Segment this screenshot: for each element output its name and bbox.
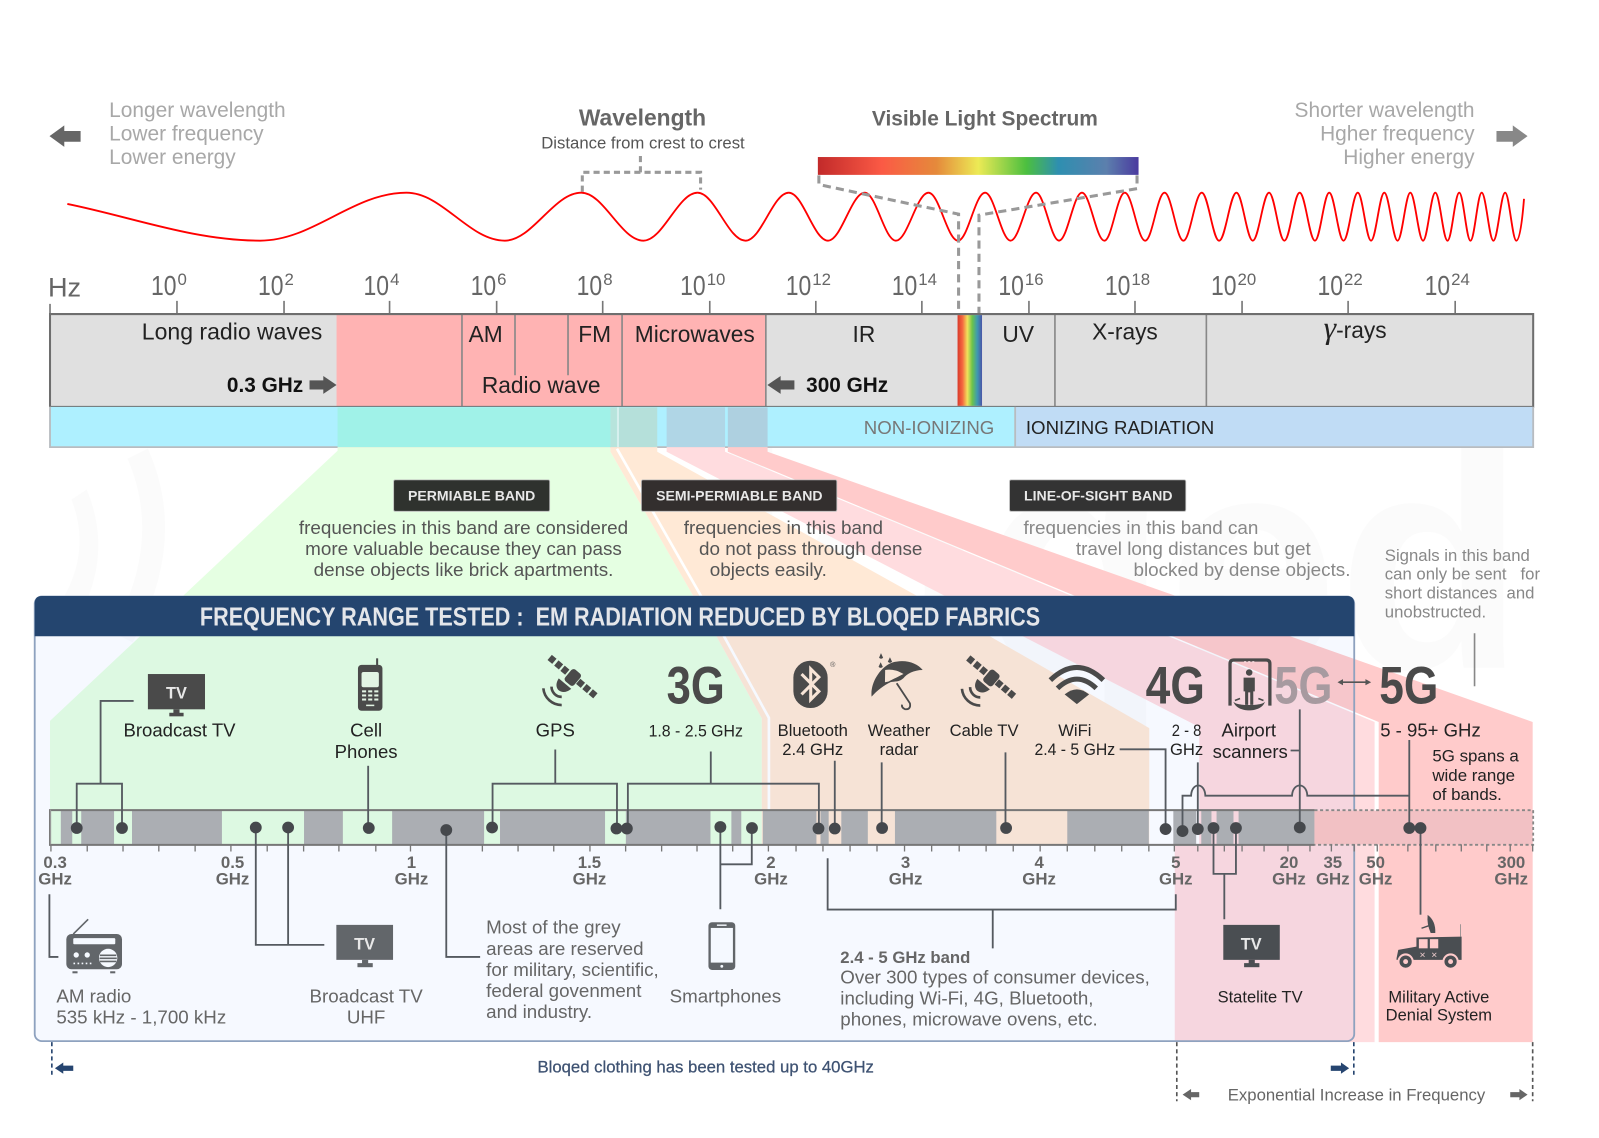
label: military active denial: [1386, 988, 1492, 1025]
text: short distance note: unobstructed.: [1385, 602, 1486, 621]
tag: semi-permeable band: [641, 480, 837, 511]
bar axis labels: 0.5: [221, 853, 244, 872]
text: line-of-sight description: frequencies in this band can: [1024, 517, 1258, 538]
label: military active denial: Denial System: [1386, 1007, 1492, 1025]
frequency axis labels: 12: [812, 270, 831, 289]
label: satellite TV: Statelite TV: [1218, 988, 1303, 1006]
bar axis labels: 4: [1034, 853, 1044, 872]
ionization strip: IONIZING RADIATION: [1026, 417, 1214, 438]
text: 2.4-5 GHz band note: Over 300 types of consumer devices,: [840, 967, 1150, 988]
spectrum band table: UV: [1002, 321, 1035, 347]
label: bluetooth: 2.4 GHz: [782, 740, 843, 759]
note: 5G spans: of bands.: [1432, 785, 1502, 804]
frequency axis labels: 14: [918, 270, 937, 289]
label: 4G range: [1170, 721, 1203, 759]
arrow: tested right: [1331, 1063, 1349, 1074]
watermark: faint logo: bloqed: [522, 391, 1525, 735]
text: semi-permeable description: do not pass through dense: [699, 538, 922, 559]
data point dots: [71, 821, 1426, 837]
label: 4G range: GHz: [1170, 740, 1203, 759]
icon: military vehicle: [1397, 915, 1462, 970]
heading: wavelength: Wavelength: [579, 104, 706, 130]
band: permeable green: [50, 447, 762, 844]
bar axis labels: GHz: [216, 870, 249, 889]
label: cell phones: Cell: [350, 720, 382, 741]
bar axis labels: GHz: [889, 870, 922, 889]
spectrum band table: Radio wave: [482, 372, 601, 398]
heading: visible light spectrum: Visible Light Spectrum: [872, 107, 1098, 130]
bar axis labels: GHz: [754, 870, 788, 889]
text: short distance note: [1385, 546, 1540, 621]
icon: wifi: [1050, 667, 1103, 704]
text: short distance note: short distances and: [1385, 584, 1534, 603]
icon: 3G: 3G: [667, 657, 725, 716]
text: grey areas note: for military, scientific,: [486, 959, 659, 980]
arrow: exponential left: [1183, 1089, 1199, 1100]
spectrum band table: X-rays: [1092, 319, 1158, 345]
frequency axis labels: 10: [1211, 270, 1236, 301]
spectrum band table: [50, 310, 1533, 407]
spectrum band table: 0.3 GHz: [227, 374, 303, 397]
frequency axis labels: 2: [285, 270, 294, 289]
label: AM radio: [56, 985, 226, 1027]
frequency axis labels: 20: [1237, 270, 1256, 289]
frequency axis labels: 8: [603, 270, 613, 289]
text: semi-permeable description: objects easily.: [710, 559, 827, 580]
label: airport scanners: [1213, 720, 1288, 762]
label: military active denial: Military Active: [1388, 988, 1489, 1006]
frequency axis labels: Hz: [48, 272, 81, 303]
spectrum band table: IR: [853, 321, 875, 347]
bar axis labels: GHz: [38, 870, 72, 889]
frequency axis labels: 10: [707, 270, 725, 289]
dashed range markers: tested: [52, 1042, 1354, 1076]
frequency axis labels: 0: [177, 270, 187, 289]
frequency axis labels: 10: [892, 270, 917, 301]
label: bluetooth: [778, 721, 848, 759]
heading: wavelength: [541, 104, 745, 152]
note: 5G spans: [1431, 747, 1519, 804]
label: broadcast TV UHF: Broadcast TV: [309, 985, 423, 1006]
ionization strip: NON-IONIZING: [864, 417, 994, 438]
panel background: [35, 597, 1354, 1041]
frequency axis labels: 10: [786, 270, 811, 301]
icon: broadcast TV UHF: [336, 925, 393, 967]
spectrum band table: FM: [578, 321, 611, 347]
text: line-of-sight description: [1024, 517, 1350, 580]
arrow: right: [1496, 125, 1528, 147]
label: cable TV: Cable TV: [950, 721, 1019, 740]
icon: AM radio: [66, 919, 122, 973]
text: 2.4-5 GHz band note: [840, 948, 1150, 1029]
frequency axis labels: 10: [1425, 270, 1450, 301]
bar axis labels: GHz: [1359, 870, 1392, 889]
text: line-of-sight description: blocked by dense objects.: [1133, 559, 1350, 580]
frequency axis labels: 10: [151, 270, 176, 301]
watermark: faint logo: [61, 391, 1525, 735]
ionization strip: [50, 407, 1533, 447]
bar axis labels: 0.3: [43, 853, 67, 872]
label: broadcast TV UHF: [309, 985, 423, 1027]
bar tick marks: [51, 844, 1533, 851]
frequency axis labels: 10: [258, 270, 284, 301]
frequency axis labels: 10: [680, 270, 706, 301]
bar axis labels: 2: [766, 853, 776, 872]
icon: broadcast TV UHF: TV: [354, 935, 375, 953]
label: weather radar: [868, 721, 931, 759]
spectrum zoom dashed lines: [819, 175, 1137, 313]
divider between green and peach: [617, 449, 769, 811]
frequency axis labels: 18: [1131, 270, 1150, 289]
icon: broadcast TV: TV: [166, 685, 187, 703]
text: semi-permeable description: [684, 517, 922, 580]
text: short distance note: Signals in this band: [1385, 546, 1530, 565]
wavelength bracket: [582, 155, 701, 192]
text: 2.4-5 GHz band note: 2.4 - 5 GHz band: [840, 948, 970, 967]
label: weather radar: radar: [880, 740, 919, 759]
bar axis labels: GHz: [1022, 870, 1056, 889]
icon: airport scanner: [1230, 660, 1270, 710]
panel header: FREQUENCY RANGE TESTED : EM RADIATION REDUCED BY BLOQED FABRICS: [200, 604, 1040, 632]
note: 5G spans: 5G spans a: [1432, 747, 1519, 766]
frequency axis labels: 24: [1451, 270, 1470, 289]
label: 3G range: 1.8 - 2.5 GHz: [649, 722, 743, 741]
panel outline: [35, 597, 1354, 1041]
tag: permiable band: [394, 480, 550, 511]
frequency axis labels: 10: [577, 270, 602, 301]
frequency axis labels: 10: [1105, 270, 1130, 301]
bar axis labels: GHz: [395, 870, 428, 889]
heading: longer wavelength: Longer wavelength: [109, 99, 286, 122]
frequency axis labels: 10: [364, 270, 389, 301]
connector lines: [49, 701, 1421, 957]
frequency axis labels: 4: [390, 270, 399, 289]
text: semi-permeable description: frequencies in this band: [684, 517, 883, 538]
icon: cable TV satellite: [956, 652, 1019, 711]
bar axis labels: 3: [901, 853, 910, 872]
text: permiable band description: more valuable because they can pass: [305, 538, 622, 559]
bar axis labels: GHz: [573, 870, 606, 889]
heading: shorter wavelength: Shorter wavelength: [1295, 99, 1475, 122]
heading: longer wavelength: [109, 99, 286, 169]
icon: faded 5G: 5G: [1274, 657, 1332, 716]
bar axis labels: GHz: [1316, 870, 1350, 889]
caption: exponential increase: Exponential Increase in Frequency: [1228, 1085, 1486, 1104]
text: permiable band description: dense objects like brick apartments.: [314, 559, 613, 580]
icon: satellite TV: [1223, 925, 1280, 967]
panel header: [35, 596, 1354, 636]
label: cell phones: [335, 720, 398, 762]
text: grey areas note: [486, 917, 659, 1022]
text: 2.4-5 GHz band note: including Wi-Fi, 4G, Bluetooth,: [840, 987, 1094, 1008]
frequency bar: [50, 810, 1533, 845]
frequency axis labels: 10: [471, 270, 496, 301]
bar axis labels: 1: [407, 853, 416, 872]
heading: wavelength: Distance from crest to crest: [541, 133, 745, 152]
bar axis labels: 5: [1171, 853, 1180, 872]
bar axis labels: GHz: [1159, 870, 1193, 889]
spectrum band table: γ-rays: [1324, 310, 1387, 345]
arrow: left: [50, 125, 81, 147]
bar axis labels: 20: [1280, 853, 1298, 872]
note leader line: [1474, 633, 1476, 686]
arrow: exponential right: [1510, 1089, 1528, 1100]
spectrum band table: Long radio waves: [142, 319, 322, 345]
text: grey areas note: areas are reserved: [486, 938, 644, 959]
arrow: tested left: [55, 1063, 73, 1074]
icon: weather umbrella: [871, 653, 923, 709]
text: permiable band description: [299, 517, 628, 580]
visible spectrum bar: [818, 157, 1139, 175]
label: airport scanners: scanners: [1213, 741, 1288, 762]
frequency axis labels: 16: [1025, 270, 1044, 289]
label: weather radar: Weather: [868, 721, 931, 740]
dashed range markers: exponential: [1177, 1042, 1533, 1101]
heading: longer wavelength: Lower energy: [109, 146, 236, 169]
bar axis labels: GHz: [1272, 870, 1306, 889]
bar axis labels: [38, 853, 1528, 889]
spectrum band table: 300 GHz: [806, 374, 888, 397]
tag: line-of-sight band: [1010, 480, 1186, 511]
frequency axis labels: 10: [1318, 270, 1343, 301]
spectrum band table: Microwaves: [635, 321, 755, 347]
heading: shorter wavelength: Hgher frequency: [1320, 122, 1475, 145]
heading: longer wavelength: Lower frequency: [109, 122, 264, 145]
text: 2.4-5 GHz band note: phones, microwave ovens, etc.: [840, 1008, 1098, 1029]
bar axis labels: 1.5: [578, 853, 601, 872]
label: AM radio: 535 kHz - 1,700 kHz: [56, 1006, 226, 1027]
label: 4G range: 2 - 8: [1172, 721, 1201, 740]
tag: permiable band: PERMIABLE BAND: [408, 488, 535, 504]
icon: 4G: 4G: [1146, 657, 1205, 716]
heading: shorter wavelength: Higher energy: [1343, 146, 1475, 169]
wave curve: [67, 193, 1524, 241]
icon: bluetooth: [793, 661, 836, 708]
label: GPS: GPS: [536, 720, 575, 741]
arrow: 5G double: [1338, 679, 1371, 685]
label: broadcast TV UHF: UHF: [347, 1006, 385, 1027]
label: 5G range: 5 - 95+ GHz: [1380, 720, 1481, 741]
tag: semi-permeable band: SEMI-PERMIABLE BAND: [656, 488, 823, 504]
bar axis labels: 35: [1323, 853, 1342, 872]
frequency axis labels: 22: [1344, 270, 1363, 289]
label: wifi: [1035, 721, 1115, 759]
label: smartphones: Smartphones: [670, 985, 781, 1006]
text: short distance note: can only be sent for: [1385, 565, 1540, 584]
label: airport scanners: Airport: [1221, 720, 1277, 741]
label: AM radio: AM radio: [56, 985, 131, 1006]
bar axis labels: 50: [1366, 853, 1385, 872]
icon: smartphone: [708, 922, 735, 970]
icon: GPS satellite: [537, 652, 600, 711]
text: permiable band description: frequencies in this band are considered: [299, 517, 628, 538]
text: grey areas note: Most of the grey: [486, 917, 621, 938]
frequency axis labels: 6: [497, 270, 507, 289]
bar axis labels: GHz: [1494, 870, 1528, 889]
tag: line-of-sight band: LINE-OF-SIGHT BAND: [1024, 488, 1172, 504]
label: cell phones: Phones: [335, 741, 398, 762]
band: semi-permeable peach: [610, 447, 1149, 844]
band: line-of-sight light pink: [667, 447, 1375, 1042]
icon: satellite TV: TV: [1241, 935, 1262, 953]
icon: bluetooth: ®: [830, 661, 836, 669]
spectrum band table: AM: [469, 321, 503, 347]
frequency axis labels: [48, 270, 1470, 314]
icon: broadcast TV: [148, 674, 205, 716]
frequency axis labels: 10: [998, 270, 1024, 301]
note: 5G spans: wide range: [1431, 766, 1515, 785]
caption: tested range: Bloqed clothing has been tested up to 40GHz: [537, 1058, 874, 1077]
heading: shorter wavelength: [1295, 99, 1475, 169]
icon: cell phone: [358, 658, 382, 711]
text: grey areas note: and industry.: [486, 1001, 592, 1022]
label: wifi: 2.4 - 5 GHz: [1035, 740, 1115, 759]
text: line-of-sight description: travel long distances but get: [1076, 538, 1311, 559]
icon: 5G: 5G: [1379, 657, 1438, 716]
label: broadcast TV: Broadcast TV: [123, 720, 236, 741]
text: grey areas note: federal govenment: [486, 980, 642, 1001]
bar axis labels: 300: [1497, 853, 1525, 872]
label: wifi: WiFi: [1058, 721, 1091, 740]
label: bluetooth: Bluetooth: [778, 721, 848, 740]
band: short-range pink: [728, 447, 1533, 1042]
